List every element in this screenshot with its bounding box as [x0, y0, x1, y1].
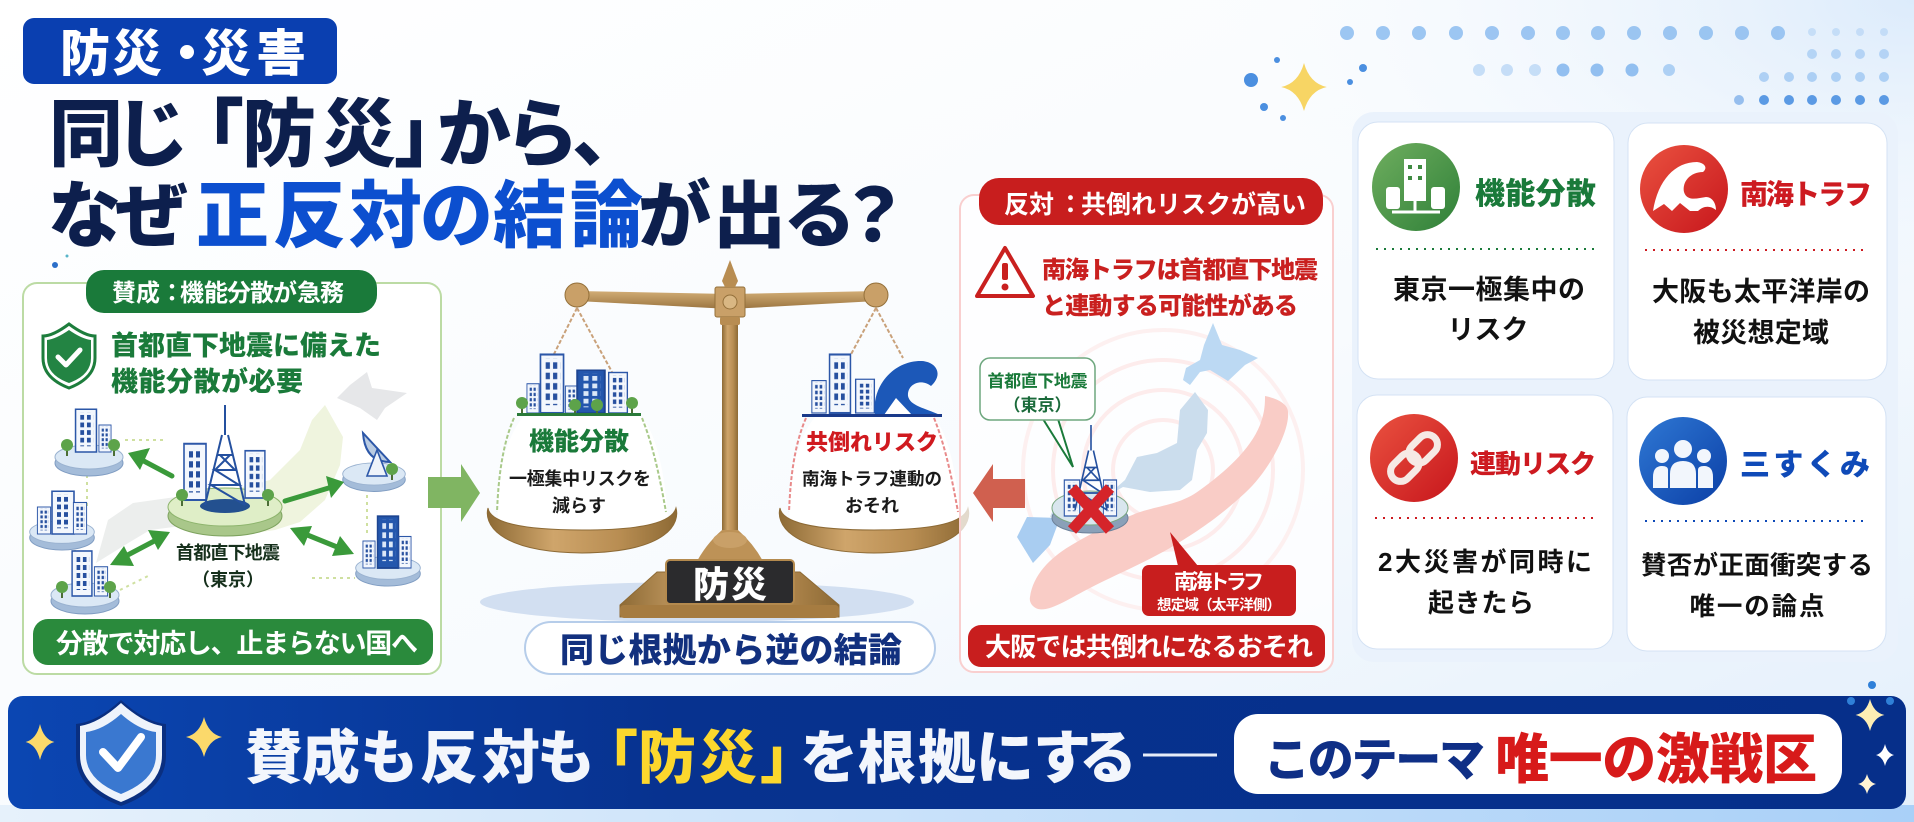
text: hub label: 首都直下地震 — [176, 543, 280, 563]
card: 南海トラフ: 南海トラフ — [1740, 179, 1872, 210]
heading pill: 賛成 — [86, 270, 377, 313]
card: 連動リスク: 連動リスク — [1470, 449, 1596, 479]
text: hub label — [176, 543, 280, 590]
callout: 首都直下地震: （東京） — [1004, 396, 1072, 415]
text: 賛成 heading — [111, 330, 381, 397]
text: right pan — [802, 430, 942, 516]
heading pill: 賛成: 賛成：機能分散が急務 — [112, 279, 344, 307]
skyline and wave: right pan — [802, 354, 942, 417]
map: rings, Japan and trough — [1017, 323, 1303, 610]
title: 同じ「防災」から、 — [49, 93, 646, 176]
tag: 防災・災害 — [23, 18, 337, 84]
text: left pan: 機能分散 — [529, 427, 629, 456]
network links — [75, 440, 367, 590]
icon: chain link — [1370, 414, 1458, 502]
heading pill: 反対 — [979, 178, 1323, 225]
text: left pan: 減らす — [552, 495, 606, 516]
pill: 同じ根拠から逆の結論 — [525, 622, 935, 674]
sparkles: right — [1856, 699, 1894, 794]
text: card 3 body: 起きたら — [1428, 588, 1534, 618]
text: 賛成 heading: 機能分散が必要 — [111, 366, 303, 397]
text: left pan — [509, 427, 651, 516]
node: satellite dish — [343, 433, 405, 491]
pill: このテーマ唯一の激戦区: このテーマ — [1264, 734, 1485, 786]
node: building mid left — [30, 491, 94, 550]
icon: warning triangle — [977, 248, 1033, 296]
text: card 4 body: 賛否が正面衝突する — [1641, 551, 1873, 580]
left pan — [487, 308, 677, 553]
title: なぜ — [48, 176, 188, 257]
text: left pan: 一極集中リスクを — [509, 469, 651, 489]
plate: 防災 — [666, 560, 794, 605]
card: 三すくみ — [1627, 397, 1886, 651]
card: 機能分散 — [1358, 122, 1614, 379]
droplets — [1847, 681, 1894, 705]
pill: 同じ根拠から逆の結論: 同じ根拠から逆の結論 — [560, 632, 902, 670]
decorative dots and sparkle: top right — [52, 26, 1889, 268]
icon: three people — [1639, 417, 1727, 505]
banner text: 賛成も反対も — [245, 726, 595, 791]
skyline: left pan — [516, 354, 641, 416]
text: card 2 body: 大阪も太平洋岸の — [1652, 277, 1870, 307]
node: blue building — [356, 516, 420, 586]
beam — [565, 260, 888, 325]
text: right pan: おそれ — [845, 496, 899, 516]
panel: 反対 — [960, 178, 1333, 672]
text: card 1 body: リスク — [1448, 315, 1528, 345]
banner text: 「防災」 — [580, 726, 818, 791]
text: card 4 body: 唯一の論点 — [1690, 593, 1824, 621]
text: card 2 body: 被災想定域 — [1693, 318, 1829, 348]
conclusion pill: 賛成 — [33, 619, 433, 665]
plate: 防災: 防災 — [693, 564, 767, 605]
node: building top left — [55, 409, 123, 476]
icon: wave — [1640, 145, 1728, 233]
text: hub label: （東京） — [192, 570, 264, 590]
card: 南海トラフ — [1628, 123, 1887, 380]
text: card 3 body: 2大災害が同時に — [1378, 547, 1592, 577]
callout: 首都直下地震 — [980, 358, 1095, 467]
text: card 3 body — [1378, 547, 1592, 618]
callout: 南海トラフ: 想定域（太平洋側） — [1157, 596, 1281, 614]
text: 賛成 heading: 首都直下地震に備えた — [111, 330, 381, 361]
conclusion pill: 反対: 大阪では共倒れになるおそれ — [985, 632, 1313, 662]
banner — [8, 681, 1906, 809]
callout: 南海トラフ: 南海トラフ — [1174, 571, 1264, 594]
icon: Tokyo hub — [168, 405, 282, 536]
banner text — [245, 726, 1137, 791]
base — [620, 530, 839, 618]
callout: 首都直下地震: 首都直下地震 — [988, 371, 1088, 391]
tag: 防災・災害: 防災・災害 — [60, 26, 306, 82]
text: card 1 body: 東京一極集中の — [1393, 275, 1585, 305]
right pan — [779, 308, 969, 553]
text: right pan: 南海トラフ連動の — [802, 469, 942, 489]
icon: Tokyo platform with cross — [1052, 425, 1128, 533]
text: right pan: 共倒れリスク — [806, 430, 938, 455]
icon: blue shield — [76, 700, 166, 806]
text: 反対 heading: 南海トラフは首都直下地震 — [1042, 256, 1318, 284]
arrow: green to scale — [428, 464, 480, 522]
map: pale Japan, left panel — [96, 372, 407, 563]
icon: buildings network — [1372, 143, 1460, 231]
scale — [480, 260, 969, 674]
text: 反対 heading — [1042, 256, 1318, 320]
conclusion pill: 賛成: 分散で対応し、止まらない国へ — [56, 629, 418, 659]
text: 反対 heading: と連動する可能性がある — [1042, 292, 1298, 320]
sparkles: left — [26, 717, 222, 760]
shadow — [480, 582, 914, 622]
callout: 南海トラフ — [1142, 532, 1296, 616]
text: card 2 body — [1652, 277, 1870, 348]
card: 連動リスク — [1357, 395, 1613, 649]
title — [48, 93, 910, 257]
heading pill: 反対: 反対：共倒れリスクが高い — [1004, 190, 1306, 219]
arrows: dispersal — [110, 448, 354, 566]
arrow: red to scale — [973, 464, 1025, 522]
banner text: を根拠にする — [800, 726, 1137, 791]
node: building lower left — [51, 551, 119, 614]
title: が出る？ — [638, 176, 910, 257]
text: card 1 body — [1393, 275, 1585, 345]
card: 三すくみ: 三すくみ — [1740, 449, 1870, 482]
title: 正反対の結論 — [196, 176, 643, 257]
icon: green shield — [43, 324, 95, 388]
pill: このテーマ唯一の激戦区 — [1234, 714, 1842, 794]
card: 機能分散: 機能分散 — [1475, 178, 1596, 211]
column — [722, 322, 738, 530]
text: card 4 body — [1641, 551, 1873, 621]
pill: このテーマ唯一の激戦区: 唯一の激戦区 — [1495, 730, 1817, 790]
panel: 賛成 — [23, 270, 441, 674]
conclusion pill: 反対 — [968, 625, 1325, 667]
